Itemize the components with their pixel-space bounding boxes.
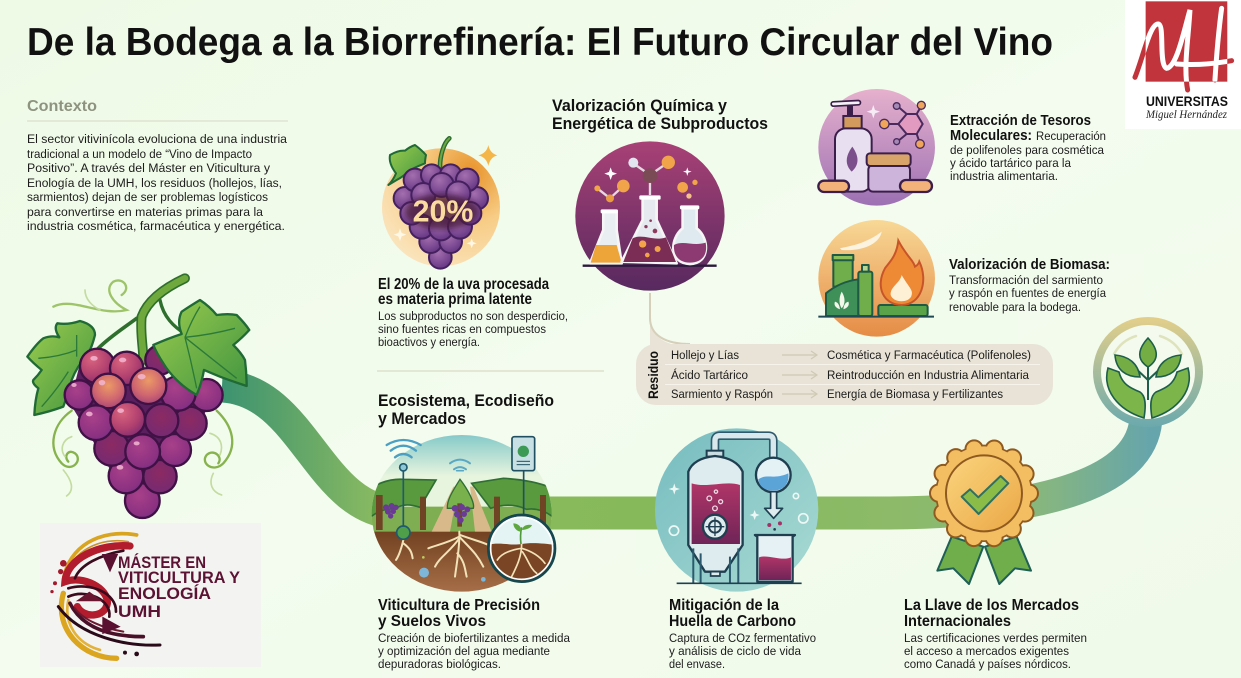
text: mitigación: y análisis de ciclo de vida — [669, 644, 801, 658]
text: extracción — [950, 113, 1106, 183]
text: contexto body — [27, 132, 287, 233]
text: mitigación: Huella de Carbono — [669, 613, 796, 630]
heading: valorización — [552, 96, 768, 133]
text: biomasa: y raspón en fuentes de energía — [949, 286, 1106, 300]
seal — [935, 445, 1033, 542]
bench — [677, 581, 802, 586]
text: contexto body: Positivo”. A través del Máster en Viticultura y — [27, 161, 271, 175]
icon: hands and sprout — [1093, 317, 1203, 427]
jar — [868, 165, 910, 192]
smart sign — [521, 471, 526, 517]
flask: left — [590, 212, 622, 263]
leaf left — [27, 321, 95, 415]
bunch backing — [70, 363, 213, 513]
icon: biomass — [818, 220, 935, 337]
heading: contexto: Contexto — [27, 98, 97, 115]
text: contexto body: para convertirse en materias primas para la — [27, 205, 263, 219]
logo: universitas miguel hernández — [1125, 0, 1241, 129]
pipe — [715, 436, 773, 458]
text: mitigación — [669, 597, 816, 671]
icon: precision vineyard — [370, 433, 557, 595]
text: 20% stat: sino fuentes ricas en compuestos — [378, 322, 546, 336]
text: contexto body: tradicional a un modelo de “Vino de Impacto — [27, 147, 252, 161]
logo: máster en viticultura y enología umh — [40, 523, 261, 667]
logo: universitas miguel hernández: Miguel Hernández — [1145, 109, 1227, 121]
beaker — [755, 535, 795, 582]
logo text — [118, 553, 241, 621]
text: la llave de los mercados: La Llave de los Mercados — [904, 597, 1079, 614]
icon: swirl — [50, 534, 160, 658]
logo text: MÁSTER EN — [118, 553, 206, 572]
text: la llave de los mercados — [904, 597, 1087, 671]
label: 20%: 20% — [413, 194, 473, 228]
row 2: Ácido Tartárico — [671, 367, 748, 382]
text: biomasa — [949, 257, 1110, 314]
label: residuo: Residuo — [645, 351, 661, 399]
text: extracción: de polifenoles para cosmética — [950, 143, 1104, 157]
row 2: Reintroducción en Industria Alimentaria — [827, 368, 1029, 382]
icon: grape bunch — [27, 278, 249, 518]
ground strip — [370, 507, 553, 532]
text: la llave de los mercados: como Canadá y países nórdicos. — [904, 657, 1071, 671]
table: residuo a destino — [636, 344, 1053, 405]
factory — [826, 255, 928, 316]
icon: certification medal — [935, 445, 1033, 584]
leaf right — [153, 300, 249, 395]
soil — [373, 528, 508, 592]
roots — [396, 532, 488, 577]
text: contexto body: industria cosmética, farmacéutica y energética. — [27, 219, 285, 233]
bottle — [833, 103, 858, 117]
tendrils — [53, 280, 232, 496]
text: la llave de los mercados: Las certificaciones verdes permiten — [904, 631, 1087, 645]
text: extracción: Moleculares: — [950, 128, 1032, 144]
text: 20% stat — [378, 276, 568, 349]
text: la llave de los mercados: Internacionales — [904, 613, 1011, 630]
icon: 20% grape — [382, 138, 500, 269]
icon: cosmetics and molecule — [818, 89, 935, 206]
text: viticultura de precisión: Viticultura de Precisión — [378, 597, 540, 614]
tank — [707, 451, 723, 457]
check mark — [962, 476, 1008, 514]
row 3: Energía de Biomasa y Fertilizantes — [827, 387, 1003, 401]
text: viticultura de precisión: y optimización del agua mediante — [378, 644, 550, 658]
text: la llave de los mercados: el acceso a mercados exigentes — [904, 644, 1069, 658]
capsules — [818, 181, 849, 192]
text: viticultura de precisión: y Suelos Vivos — [378, 613, 486, 630]
text: contexto body: Enología de la UMH, los residuos (hollejos, lías, — [27, 176, 282, 190]
ribbons — [937, 537, 983, 584]
logo text: ENOLOGÍA — [118, 584, 211, 603]
flow ribbon — [222, 386, 1146, 513]
sensor — [387, 440, 470, 539]
row 1: Hollejo y Lías — [671, 348, 739, 362]
logo: universitas miguel hernández: UNIVERSITAS — [1146, 93, 1228, 109]
text: extracción: industria alimentaria. — [950, 169, 1058, 183]
flame — [881, 241, 923, 305]
soil inset — [488, 515, 555, 582]
flask: right — [673, 208, 706, 264]
flask: center — [622, 198, 677, 263]
logo text: VITICULTURA Y — [118, 568, 241, 587]
text: biomasa: Transformación del sarmiento — [949, 273, 1103, 287]
flask — [756, 458, 791, 492]
icon: fermentation tank — [655, 428, 818, 592]
grapes — [383, 503, 470, 523]
vines — [370, 479, 436, 517]
text: viticultura de precisión: Creación de biofertilizantes a medida — [378, 631, 570, 645]
row 1: Cosmética y Farmacéutica (Polifenoles) — [827, 348, 1031, 362]
row 1 — [671, 348, 1031, 362]
text: biomasa: Valorización de Biomasa: — [949, 257, 1110, 273]
molecule — [885, 105, 923, 143]
text: biomasa: renovable para la bodega. — [949, 300, 1081, 314]
text: contexto body: El sector vitivinícola evoluciona de una industria — [27, 132, 287, 146]
text: mitigación: del envase. — [669, 657, 725, 671]
logo text: UMH — [118, 602, 161, 621]
text: 20% stat: bioactivos y energía. — [378, 335, 480, 349]
arrow — [765, 492, 783, 518]
grapes — [65, 345, 223, 518]
icon: laboratory flasks — [575, 141, 725, 291]
heading: ecosistema: y Mercados — [378, 409, 466, 428]
molecules — [597, 162, 668, 198]
heading: ecosistema: Ecosistema, Ecodiseño — [378, 391, 554, 410]
panel: contexto — [27, 98, 288, 233]
text: viticultura de precisión: depuradoras biológicas. — [378, 657, 501, 671]
heading: ecosistema — [378, 391, 554, 428]
text: 20% stat: El 20% de la uva procesada — [378, 276, 549, 293]
text: contexto body: sarmientos) dejan de ser problemas logísticos — [27, 190, 268, 204]
stem — [98, 278, 187, 360]
heading: valorización: Energética de Subproductos — [552, 114, 768, 133]
highlights — [71, 356, 146, 470]
text: viticultura de precisión — [378, 597, 570, 671]
connector — [650, 293, 682, 346]
text: mitigación: Captura de COz fermentativo — [669, 631, 816, 645]
row 3: Sarmiento y Raspón — [671, 387, 773, 401]
text: extracción: Extracción de Tesoros — [950, 113, 1091, 129]
heading: valorización: Valorización Química y — [552, 96, 728, 115]
title: De la Bodega a la Biorrefinería: El Futuro Circular del Vino — [27, 21, 1053, 64]
row 2 — [671, 367, 1029, 382]
text: extracción: Recuperación — [1036, 129, 1106, 143]
text: 20% stat: Los subproductos no son desperdicio, — [378, 309, 568, 323]
row 3 — [671, 387, 1003, 401]
text: mitigación: Mitigación de la — [669, 597, 779, 614]
text: 20% stat: es materia prima latente — [378, 291, 532, 308]
text: extracción: y ácido tartárico para la — [950, 156, 1071, 170]
